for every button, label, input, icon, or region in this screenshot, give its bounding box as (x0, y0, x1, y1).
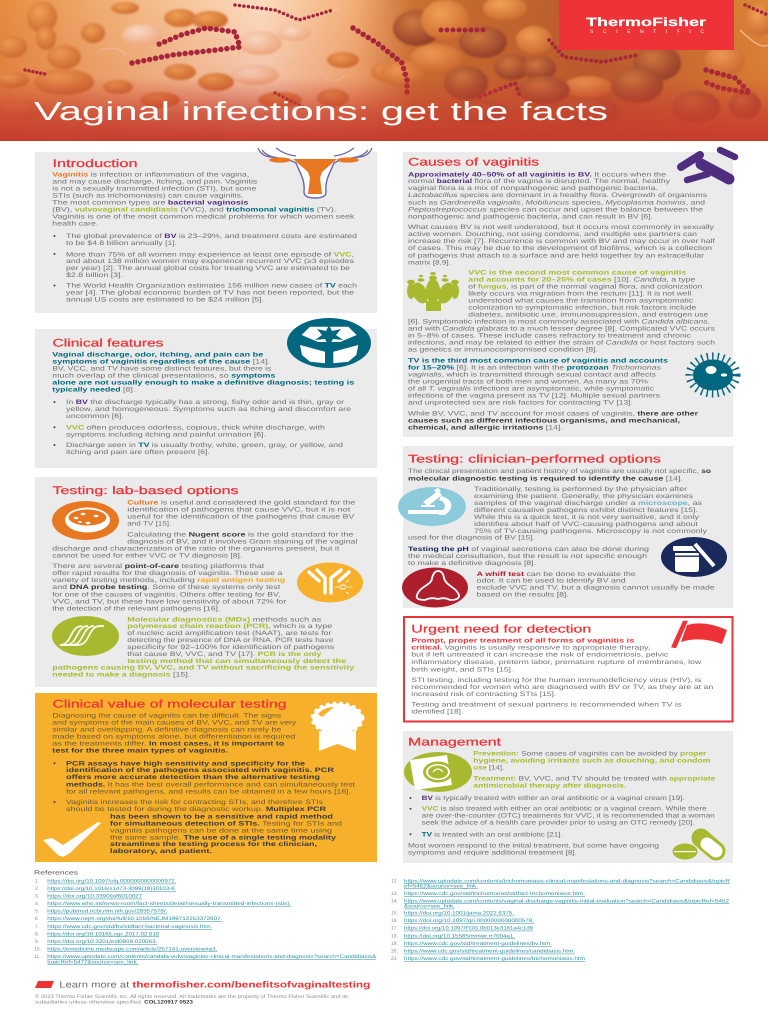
text: TV cause (408, 358, 669, 407)
list: prevalence bullets: per year) [2]. The annual global costs for treating VVC are estimated to be (66, 265, 351, 272)
list: prevalence bullets: annual US costs are estimated to be $24 million [5]. (66, 297, 264, 304)
text: bacterial vaginosis: increase the risk [7]. Recurrence is common with BV and may occur in over half (408, 238, 715, 245)
text: symptoms overview: much overlap of the clinical presentations, so symptoms (52, 372, 276, 380)
panel: management (403, 731, 733, 863)
list: prevalence bullets: year [4]. The global economic burden of TV has not been reported, but the (66, 290, 355, 297)
text: intro paragraph: health care. (52, 220, 99, 228)
list: prevalence bullets: More than 75% of all women may experience at least one episode of VVC , (66, 251, 354, 258)
icon: protozoan (690, 358, 736, 392)
references: right column: 21. (391, 956, 398, 962)
text: whiff test: based on the results [8]. (477, 592, 569, 599)
references: left column: 6. (35, 916, 39, 922)
text: prevention and treatment: Prevention: Some cases of vaginitis can be avoided by proper (473, 750, 707, 757)
icon: pills (672, 838, 716, 860)
references: left column: https://doi.org/10.1016/s1473-3099(18)30103-8. (47, 886, 176, 892)
text: culture and Nugent score: diagnosis of BV, and it involves Gram staining of the vaginal (127, 538, 357, 545)
panel: clinical features (35, 318, 377, 468)
text: closing note: Most women respond to the initial treatment, but some have ongoing (408, 842, 660, 849)
references: left column: 5. (35, 909, 39, 915)
list: PCR bullets: offers more accurate detection than the alternative testing (66, 774, 320, 781)
text: whiff test: exclude VVC and TV, but a diagnosis cannot usually be made (477, 585, 715, 592)
text: bacterial vaginosis: What causes BV is not well understood, but it occurs most commonly in sexually (408, 224, 715, 231)
text: other causes (408, 410, 699, 431)
text: diagnosis intro: Diagnosing the cause of vaginitis can be difficult. The signs (52, 713, 281, 720)
list: treatment bullets: are over-the-counter (OTC) treatments for VVC, it is recommended that a woman (422, 813, 715, 820)
references: left column: References (34, 869, 78, 876)
heading: Testing: clinician-performed options (408, 454, 662, 466)
text: symptoms overview: alone are not usually enough to make a definitive diagnosis; testing is (52, 380, 355, 386)
copyright (35, 994, 349, 1006)
references: right column: 12. (391, 878, 398, 884)
list: prevalence bullets (54, 233, 358, 304)
text: urgent treatment: Prompt, proper treatment of all forms of vaginitis is (411, 638, 635, 645)
text: molecular diagnostics: Molecular diagnostics (MDx) methods such as (127, 616, 321, 623)
text: bacterial vaginosis: matrix [8,9]. (408, 260, 451, 267)
references: left column: https://www.who.int/news-room/fact-sheets/detail/sexually-transmitted-infections-(stis). (47, 901, 291, 907)
text: prevention and treatment: use [14]. (473, 764, 505, 771)
references: left column: 11. (34, 954, 41, 960)
call to action: thermofisher.com/benefitsofvaginaltesting (132, 980, 370, 990)
references: left column: https://doi.org/10.3201/eid0809.020063. (47, 939, 157, 945)
list: PCR bullets: should be tested for during the diagnostic workup. Multiplex PCR (66, 806, 327, 813)
text: urgent treatment: but if left untreated it can increase the risk of endometriosis, pelvic (411, 652, 669, 659)
list: symptoms bullets: itching and pain are often present [6]. (66, 449, 210, 456)
references: left column: 7. (35, 924, 39, 930)
references: right column: 13. (391, 891, 398, 897)
text: prevention and treatment (473, 750, 716, 790)
text: point-of-care (52, 563, 287, 612)
text: whiff test (477, 571, 715, 599)
list: PCR bullets: identification of the pathogens associated with vaginitis. PCR (66, 767, 335, 774)
text: pH testing: Testing the pH of vaginal secretions can also be done during (408, 546, 650, 553)
text: urgent treatment: Testing and treatment of sexual partners is recommended when TV is (411, 702, 681, 709)
references: left column: https://emedicine.medscape.com/article/257141-overview#a3. (47, 946, 217, 952)
references: right column: https://doi.org/10.1097/FOG.0b013e3181a4c1d9 (404, 926, 533, 932)
text: whiff test: A whiff test can be done to evaluate the (477, 571, 636, 578)
text: prevention and treatment: hygiene, avoiding irritants such as douching, and condom (473, 757, 711, 764)
references: right column: https://www.cdc.gov/std/treatment-guidelines/trichomoniasis.htm (404, 956, 585, 962)
list: prevalence bullets: $2.8 billion [3]. (66, 272, 123, 279)
icon: bacteria rods (681, 150, 735, 180)
references: left column: https://doi.org/10.1097/olq.0000000000000972. (47, 879, 176, 885)
list: symptoms bullets (54, 399, 352, 456)
text: molecular diagnostics: pathogens causing BV, VVC, and TV without sacrificing the sensitivity (52, 665, 355, 672)
text: point-of-care: the detection of the relevant pathogens [16]. (52, 605, 221, 612)
text: bacterial vaginosis: Approximately 40–50% of all vaginitis is BV. It occurs when the (408, 171, 667, 178)
text: culture and Nugent score: Culture is useful and considered the gold standard for the (127, 499, 356, 506)
panel: urgent need for detection (404, 617, 732, 722)
text: molecular diagnostics: that cause BV, VVC, and TV [17]. PCR is the only (127, 651, 322, 658)
text: TV cause: for 15–20% [6]. It is an infection with the protozoan Trichomonas (408, 365, 662, 372)
references: left column: https://www.cdc.gov/std/bv/stdfact-bacterial-vaginosis.htm. (47, 924, 212, 930)
text: VVC cause: and with Candida glabrata to a much lesser degree [8]. Complicated VVC occurs (408, 326, 715, 333)
references: left column: https://doi.org/10.3390/jof6010027 (47, 894, 143, 900)
text: point-of-care: for one of the causes of vaginitis. Others offer testing for BV, (52, 591, 281, 598)
text: VVC cause: understood what causes the transition from asymptomatic (468, 298, 694, 305)
references: left column: 3. (35, 894, 39, 900)
text: microscopy: used for the diagnosis of BV [15]. (408, 535, 535, 542)
list: PCR bullets: streamlines the testing process for the clinician, (110, 841, 317, 848)
text: whiff test: odor. It can be used to identify BV and (477, 578, 626, 585)
icon: red flag (671, 621, 727, 648)
text: molecular diagnostics: polymerase chain reaction (PCR) , which is a type (127, 623, 333, 630)
references: right column: https://www.uptodate.com/contents/vaginal-discharge-vaginitis-initial-evaluation?search=Candidiasis&topicRef=5452 (404, 898, 729, 904)
list: PCR bullets: methods. It has the best overall performance and can simultaneously test (66, 781, 355, 788)
references: left column: 8. (35, 931, 39, 937)
icon: PCR curves (52, 616, 119, 656)
references: left column: 1. (35, 879, 39, 885)
text: microscopy: Traditionally, testing is performed by the physician after (474, 486, 688, 493)
icon: pH strip (661, 537, 727, 577)
list: prevalence bullets: The World Health Organization estimates 156 million new cases of TV each (66, 283, 358, 290)
text: diagnosis intro: similar and overlapping. A definitive diagnosis can rarely be (52, 727, 282, 734)
call to action (35, 980, 370, 990)
references: left column: 9. (35, 939, 39, 945)
list: prevalence bullets: The global prevalence of BV is 23–29%, and treatment costs are estimated (66, 233, 358, 240)
text: culture and Nugent score (52, 499, 357, 559)
text: intro paragraph: The most common types are bacterial vaginosis (52, 200, 249, 206)
references: left column: https://doi.org/10.1016/j.ogc.2017.02.010 (47, 931, 160, 937)
references: left column: 4. (35, 901, 39, 907)
text: VVC cause (408, 269, 716, 354)
panel: clinical value of molecular testing (35, 693, 377, 862)
list: symptoms bullets: VVC often produces odorless, copious, thick white discharge, with (66, 424, 326, 431)
list: prevalence bullets: and about 138 million women may experience recurrent VVC (≥3 episodes (66, 258, 354, 265)
logo: ThermoFisher (586, 15, 706, 29)
text: point-of-care: and DNA probe testing . Some of these systems only test (52, 584, 281, 591)
text: point-of-care: There are several point-of-care testing platforms that (52, 563, 265, 570)
references: right column: 14. (391, 898, 398, 904)
text: TV cause: infections of the vagina present as TV [12]. Multiple sexual partners (408, 393, 660, 400)
text: intro paragraph: and may cause discharge, itching, and pain. Vaginitis (52, 178, 257, 186)
list: treatment bullets: VVC is also treated with either an oral antibiotic or a vaginal cream. While there (422, 806, 707, 813)
text: microscopy: While this is a quick test, it is not very sensitive, and it only (474, 514, 700, 521)
icon: fungus (407, 272, 459, 311)
list: symptoms bullets: Discharge seen in TV is usually frothy, white, green, gray, or yellow, and (66, 442, 344, 449)
text: diagnosis intro: and symptoms of the main causes of BV, VVC, and TV are very (52, 720, 297, 727)
hero banner (0, 0, 768, 141)
text: intro paragraph: is not a sexually transmitted infection (STI), but some (52, 186, 257, 192)
list: treatment bullets: seek the advice of a health care provider prior to using an OTC remedy [20]. (422, 820, 695, 827)
text: VVC cause: infections, and may be related to either the strain of Candida or host factors such (408, 340, 716, 347)
copyright: © 2023 Thermo Fisher Scientific Inc. All rights reserved. All trademarks are the property of Thermo Fisher Scientific and its (35, 994, 349, 1000)
list: treatment bullets (410, 795, 715, 838)
references: right column: https://www.cdc.gov/std/treatment-guidelines/candidiasis.htm. (404, 949, 575, 955)
text: clinician intro: molecular diagnostic testing is required to identify the cause [14]. (408, 475, 683, 482)
text: microscopy: identifies about half of VVC-causing pathogens and about (474, 521, 698, 528)
references: left column: https://pubmed.ncbi.nlm.nih.gov/28357578/. (47, 909, 167, 915)
text: symptoms overview: BV, VCC, and TV have some distinct features, but there is (52, 366, 271, 372)
references: right column: https://doi.org/10.15585/mmwr.rr7004a1. (404, 933, 515, 939)
text: VVC cause: likely occurs via migration from the rectum [11]. It is not well (468, 291, 691, 298)
text: symptoms overview: typically needed [8]. (52, 386, 136, 394)
text: urgent treatment: inflammatory disease, preterm labor, premature rupture of membranes, low (411, 659, 702, 666)
heading: Management (408, 736, 501, 748)
icon: check mark (43, 822, 101, 857)
icon: award ribbon (312, 704, 362, 751)
text: other causes: causes such as different infectious organisms, and mechanical, (408, 417, 680, 424)
title: Vaginal infections: get the facts (34, 96, 608, 126)
references: right column: https://www.cdc.gov/std/treatment-guidelines/bv.htm. (404, 941, 552, 947)
list: symptoms bullets: In BV the discharge typically has a strong, fishy odor and is thin, gray or (66, 399, 345, 406)
text: pH testing: the medical consultation, but the result is not specific enough (408, 553, 648, 560)
heading: Testing: lab-based options (52, 485, 239, 497)
list: prevalence bullets: to be $4.8 billion annually [1]. (66, 240, 177, 247)
text: VVC cause: VVC is the second most common cause of vaginitis (468, 269, 687, 276)
text: culture and Nugent score: identification of pathogens that cause VVC, but it is not (127, 506, 351, 513)
text: diagnosis intro: as the treatments differ. In most cases, it is important to (52, 741, 284, 748)
panel: causes of vaginitis (403, 150, 736, 437)
references: right column: 19. (391, 941, 398, 947)
text: bacterial vaginosis: normal bacterial flora of the vagina is disrupted. The normal, healthy (408, 178, 671, 185)
text: culture and Nugent score: cannot be used for either VVC or TV diagnosis [8]. (52, 552, 243, 559)
icon: antibody (297, 562, 363, 602)
logo (559, 0, 734, 50)
references: left column: 10. (34, 946, 41, 952)
text: clinician intro (408, 468, 711, 482)
text: molecular diagnostics: of nucleic acid amplification test (NAAT), are tests for (127, 630, 332, 637)
text: symptoms overview: symptoms of vaginitis regardless of the cause [14]. (52, 358, 271, 366)
references: right column: &source=see_link. (404, 904, 455, 910)
text: point-of-care: variety of testing methods, including rapid antigen testing (52, 577, 285, 584)
text: culture and Nugent score: Calculating the Nugent score is the gold standard for the (127, 531, 354, 538)
text: VVC cause: diabetes, antibiotic use, immunosuppression, and estrogen use (468, 312, 709, 319)
text: other causes: chemical, and allergic irritations [14]. (408, 424, 563, 431)
text: molecular diagnostics (52, 616, 355, 679)
text: molecular diagnostics: needed to make a diagnosis [15]. (52, 672, 191, 679)
text: urgent treatment: STI testing, including testing for the human immunodeficiency virus (HIV), is (411, 677, 701, 684)
list: treatment bullets: TV is treated with an oral antibiotic [21]. (422, 831, 563, 838)
text: bacterial vaginosis: such as Gardnerella vaginalis , Mobiluncus species, Mycoplasma hominis , and (408, 199, 706, 206)
text: molecular diagnostics: detecting the presence of DNA or RNA. PCR tests have (127, 637, 334, 644)
heading: Introduction (52, 158, 138, 170)
text: intro paragraph (52, 172, 355, 228)
references: right column: 18. (391, 933, 398, 939)
references: right column: 20. (391, 949, 398, 955)
text: diagnosis intro: made based on symptoms alone, but differentiation is required (52, 734, 296, 741)
icon: uterus (258, 148, 372, 198)
text: pH testing: to make a definitive diagnosis [8]. (408, 560, 536, 567)
references: left column: https://www.nejm.org/doi/full/10.1056/NEJM199712253372607. (47, 916, 222, 922)
text: intro paragraph: (BV), vulvovaginal candidiasis (VVC), and trichomonal vaginitis (TV). (52, 206, 337, 214)
references: right column: ef=5452&source=see_link. (404, 883, 478, 889)
references: right column: https://www.cdc.gov/std/trichomonas/stdfact-trichomoniasis.htm. (404, 891, 585, 897)
text: bacterial vaginosis: Lactobacillus species are dominant in a healthy flora. Overgrowth of organisms (408, 192, 707, 199)
heading: Urgent need for detection (411, 624, 591, 636)
text: bacterial vaginosis: of cases. This may be due to the development of biofilms, which is a collection (408, 245, 713, 252)
panel: clinician-performed testing (398, 446, 733, 608)
text: diagnosis intro: test for the three main types of vaginitis. (52, 748, 229, 755)
list: PCR bullets (54, 760, 355, 855)
text: VVC cause: and accounts for 20–25% of cases [10]. Candida , a type (468, 277, 696, 284)
references: right column: 16. (391, 918, 398, 924)
text: prevention and treatment: Treatment: BV, VVC, and TV should be treated with appropriate (473, 776, 716, 783)
text: urgent treatment: critical. Vaginitis is usually responsive to appropriate therapy, (411, 645, 651, 652)
text: microscopy: 75% of TV-causing pathogens. Microscopy is not commonly (474, 528, 708, 535)
text: microscopy: different causative pathogens exhibit distinct features [15]. (474, 507, 698, 514)
text: other causes: While BV, VVC, and TV account for most cases of vaginitis, there are other (408, 410, 699, 417)
text: bacterial vaginosis: Peptostreptococcus species can occur and upset the balance between the (408, 206, 704, 213)
text: diagnosis intro (52, 713, 297, 755)
list: PCR bullets: vaginitis pathogens can be done at the same time using (110, 827, 333, 834)
text: VVC cause: colonization to symptomatic infection, but risk factors include (468, 305, 697, 312)
text: closing note: symptoms and require additional treatment [8]. (408, 849, 577, 856)
text: TV cause: TV is the third most common cause of vaginitis and accounts (408, 358, 669, 365)
panel: introduction (35, 148, 377, 313)
text: VVC cause: as genetics or immunocompromised condition [8]. (408, 347, 598, 354)
list: PCR bullets: for all relevant pathogens, and results can be obtained in a few hours [16]. (66, 788, 351, 795)
text: culture and Nugent score: discharge and characterization of the ratio of the organisms present, but it (52, 545, 340, 552)
text: bacterial vaginosis: of pathogens that attach to a surface and are held together by an extracellular (408, 252, 705, 259)
text: symptoms overview (52, 352, 355, 394)
text: clinician intro: The clinical presentation and patient history of vaginitis are usually not specific, so (408, 468, 711, 475)
references: right column: https://www.uptodate.com/contents/trichomoniasis-clinical-manifestations-and-diagnosis?search=Candidiasis&topicR (404, 878, 730, 884)
references: left column: 2. (35, 886, 39, 892)
text: molecular diagnostics: testing method that can simultaneously detect the (127, 658, 347, 665)
icon: microscope (398, 487, 466, 526)
text: intro paragraph: Vaginitis is infection or inflammation of the vagina, (52, 172, 250, 178)
list: PCR bullets: PCR assays have high sensitivity and specificity for the (66, 760, 306, 767)
list: symptoms bullets: symptoms including itching and painful urination [6]. (66, 431, 266, 438)
list: symptoms bullets: uncommon [6]. (66, 413, 124, 420)
text: bacterial vaginosis: nonpathogenic and pathogenic bacteria, and can result in BV [6]. (408, 213, 653, 220)
text: TV cause: and unprotected sex are risk factors for contracting TV [13]. (408, 400, 633, 407)
copyright: subsidiaries unless otherwise specified. COL120917 0523 (35, 1000, 193, 1006)
references: left column: https://www.uptodate.com/contents/candida-vulvovaginitis-clinical-manifestations-and-diagnosis?search=Candidiasis& (47, 954, 377, 960)
list: PCR bullets: Vaginitis increases the risk for contracting STIs, and therefore STIs (66, 799, 323, 806)
text: bacterial vaginosis (408, 171, 715, 267)
heading: Causes of vaginitis (408, 157, 540, 169)
text: TV cause: of all T. vaginalis infections are asymptomatic, while symptomatic (408, 386, 655, 393)
text: urgent treatment: birth weight, and STIs [15]. (411, 666, 514, 673)
list: PCR bullets: has been shown to be a sensitive and rapid method (110, 813, 333, 820)
text: microscopy (408, 486, 708, 542)
text: microscopy: examining the patient. Generally, the physician examines (474, 493, 693, 500)
text: bacterial vaginosis: vaginal flora is a mix of nonpathogenic and pathogenic bacteria. (408, 185, 658, 192)
list: symptoms bullets: yellow, and homogeneous. Symptoms such as itching and discomfort are (66, 406, 352, 413)
text: culture and Nugent score: and TV [15]. (127, 520, 172, 527)
logo: SCIENTIFIC (590, 29, 704, 35)
text: VVC cause: in 5–8% of cases. These include cases refractory to treatment and chronic (408, 333, 692, 340)
text: VVC cause: [6]. Symptomatic infection is most commonly associated with Candida albicans , (408, 319, 710, 326)
heading: Clinical features (52, 338, 164, 350)
list: treatment bullets: BV is typically treated with either an oral antibiotic or a vaginal cream [19]. (422, 795, 685, 802)
text: point-of-care: offer rapid results for the diagnosis of vaginitis. These use a (52, 570, 283, 577)
text: TV cause: the urogenital tracts of both men and women. As many as 70% (408, 379, 648, 386)
text: intro paragraph: STIs (such as trichomoniasis) can cause vaginitis. (52, 192, 244, 200)
text: VVC cause: of fungus , is part of the normal vaginal flora, and colonization (468, 284, 703, 291)
references: right column: https://doi.org/10.1001/jama.2022.6375. (404, 911, 514, 917)
text: culture and Nugent score: useful for the identification of the pathogens that cause BV (127, 513, 355, 520)
text: molecular diagnostics: specificity for 92–100% for identification of pathogens (127, 644, 334, 651)
references: right column: https://doi.org/10.1097/qri.0000000000000578. (404, 918, 534, 924)
text: microscopy: samples of the vaginal discharge under a microscope , as (474, 500, 702, 507)
references: right column: 15. (391, 911, 398, 917)
references: left column: topicRef=5477&source=see_link. (47, 959, 138, 965)
text: intro paragraph: Vaginitis is one of the most common medical problems for which women seek (52, 214, 355, 220)
text: point-of-care: VVC, and TV, but these have low sensitivity of about 72% for (52, 598, 287, 605)
text: TV cause: vaginalis , which is transmitted through sexual contact and affects (408, 372, 656, 379)
icon: nose (402, 568, 468, 608)
references: right column (391, 878, 730, 962)
text: urgent treatment: increased risk of contracting STIs [15]. (411, 691, 557, 698)
text: urgent treatment: recommended for women who are diagnosed with BV or TV, as they are at an (411, 684, 714, 691)
call to action: Learn more at (59, 980, 130, 990)
icon: condom packet (404, 752, 472, 792)
list: PCR bullets: for simultaneous detection of STIs. Testing for STIs and (110, 820, 343, 827)
icon: clinical star (287, 318, 371, 368)
references: right column: 17. (391, 926, 398, 932)
text: closing note (408, 842, 660, 856)
text: symptoms overview: Vaginal discharge, odor, itching, and pain can be (52, 352, 264, 359)
text: prevention and treatment: antimicrobial therapy after diagnosis. (473, 783, 627, 790)
heading: Clinical value of molecular testing (52, 698, 286, 710)
text: urgent treatment (411, 638, 714, 716)
list: PCR bullets: laboratory, and patient. (110, 848, 212, 855)
list: PCR bullets: the same sample. The use of a single testing modality (110, 834, 337, 841)
text: bacterial vaginosis: active women. Douching, not using condoms, and multiple sex partners can (408, 231, 698, 238)
icon: petri dish (52, 501, 119, 540)
references: left column (34, 869, 377, 965)
text: urgent treatment: identified [18]. (411, 709, 464, 716)
panel: lab-based testing (35, 477, 377, 687)
text: pH testing (408, 546, 650, 567)
